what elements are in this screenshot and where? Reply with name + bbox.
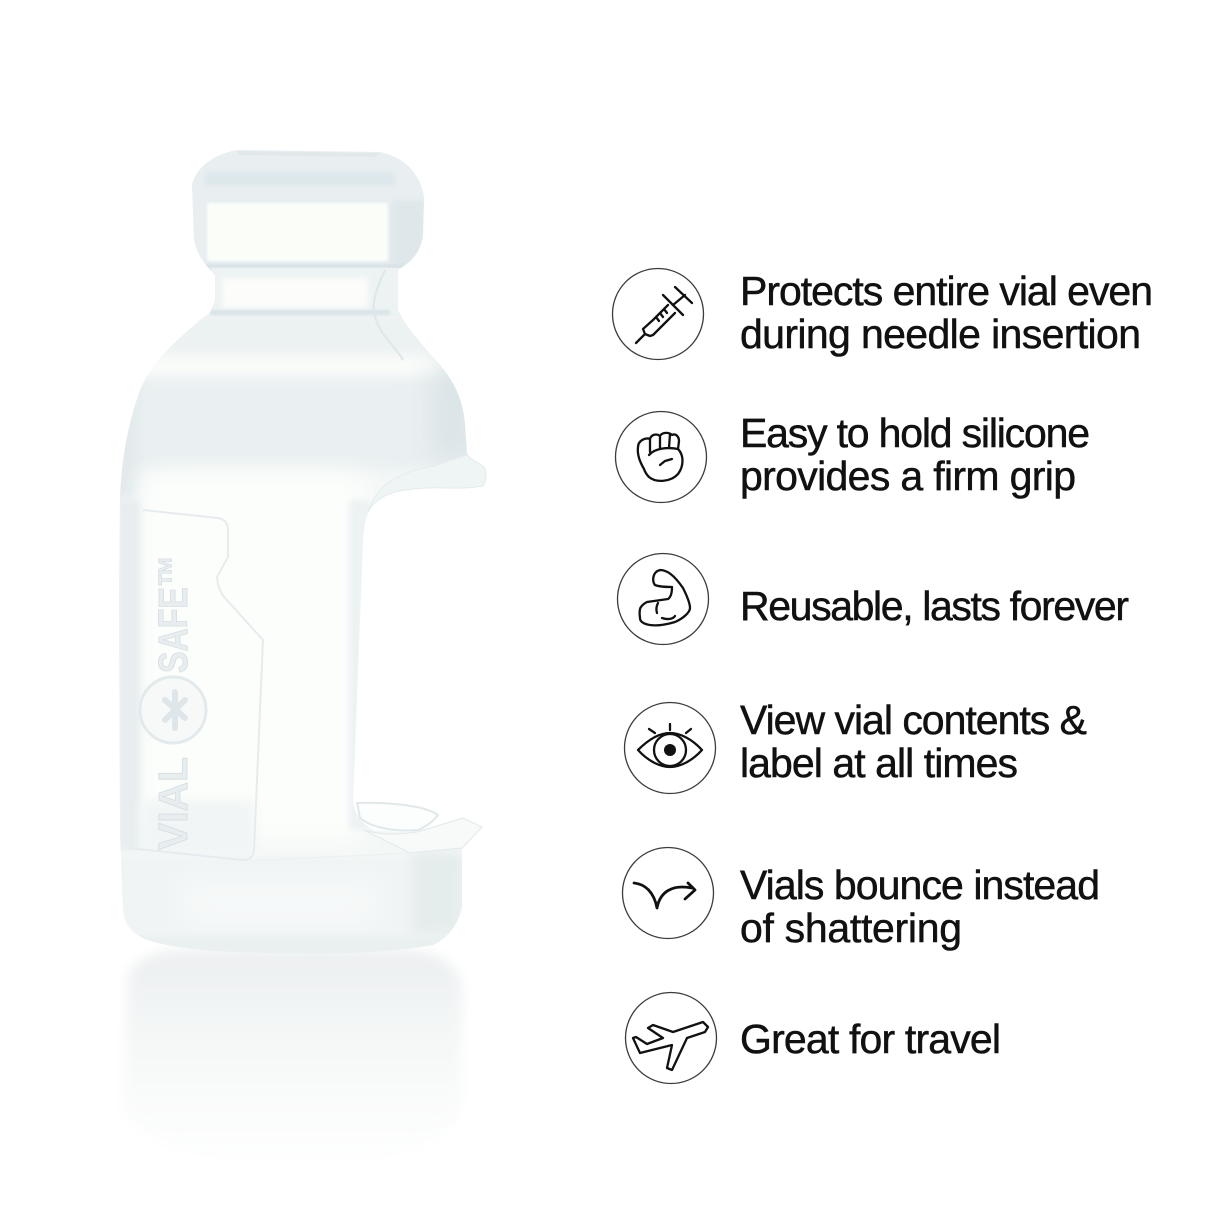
product: silicone vial protector xyxy=(119,150,486,953)
icon: airplane xyxy=(626,992,716,1084)
text: visible contents: label at all times xyxy=(740,740,1018,786)
embossed logo ring xyxy=(140,677,206,743)
icon: syringe xyxy=(612,268,704,360)
bottom flange xyxy=(364,818,482,853)
text: firm grip: provides a firm grip xyxy=(740,453,1076,499)
text: visible contents: View vial contents & xyxy=(740,697,1087,743)
feature: reusable xyxy=(618,554,1129,644)
cap seam xyxy=(391,205,393,262)
label window xyxy=(128,510,263,860)
foot seam xyxy=(250,853,408,932)
text: travel: Great for travel xyxy=(740,1016,1001,1062)
feature: bounce xyxy=(622,848,1100,951)
icon: bounce arrow xyxy=(622,848,714,938)
icon: flexed arm xyxy=(618,554,708,644)
text: needle insertion: during needle insertion xyxy=(740,311,1141,357)
icon: eye xyxy=(624,702,716,794)
neck seam xyxy=(374,270,403,360)
text: firm grip xyxy=(740,410,1090,499)
top flange xyxy=(368,455,486,512)
text: bounce: of shattering xyxy=(740,905,962,951)
feature: visible contents xyxy=(624,697,1087,794)
text: needle insertion xyxy=(740,268,1153,357)
embossed wordmark: SAFE: SAFE™ xyxy=(150,555,196,673)
text: firm grip: Easy to hold silicone xyxy=(740,410,1090,456)
bottom opening xyxy=(357,803,438,830)
text: bounce: Vials bounce instead xyxy=(740,862,1100,908)
feature: needle insertion xyxy=(612,268,1153,360)
text: visible contents xyxy=(740,697,1087,786)
text: reusable: Reusable, lasts forever xyxy=(740,583,1129,629)
feature: travel xyxy=(626,992,1001,1084)
text: needle insertion: Protects entire vial even xyxy=(740,268,1153,314)
embossed wordmark: VIAL: VIAL xyxy=(150,757,196,850)
text: bounce xyxy=(740,862,1100,951)
infographic canvas xyxy=(119,150,1151,1084)
embossed logo mark xyxy=(165,692,185,728)
reflection under vial protector xyxy=(122,950,462,1170)
feature: firm grip xyxy=(616,410,1090,502)
top rim xyxy=(236,151,378,157)
icon: fist xyxy=(616,412,706,502)
